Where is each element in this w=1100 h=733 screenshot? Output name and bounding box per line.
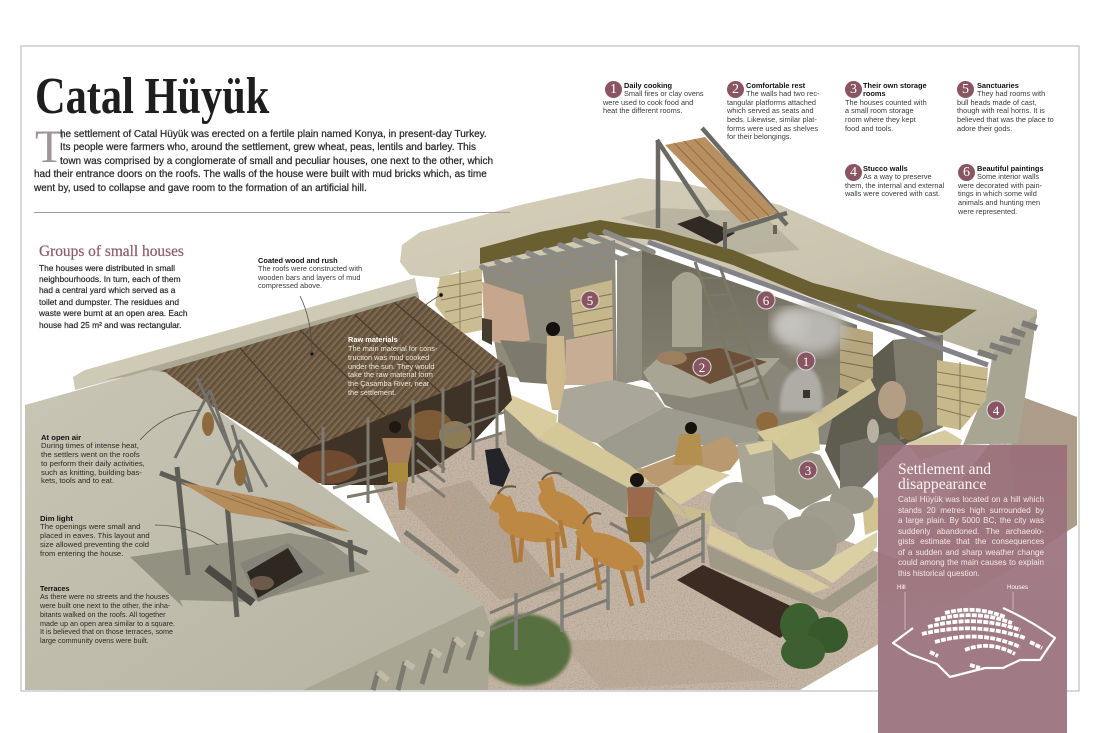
- man beside the goats: [625, 473, 655, 542]
- panel text: could among the main causes to explain: [898, 558, 1044, 567]
- diagram of the hill with houses: [892, 592, 1056, 678]
- text: groups of small houses: had a central yard which served as a: [39, 285, 175, 295]
- text: groups of small houses: house had 25 m² and was rectangular.: [39, 320, 181, 330]
- back house: flat roof: [400, 178, 1037, 353]
- intro text: went by, used to collapse and gave room to the formation of an artificial hill.: [34, 183, 367, 194]
- shed under the thatch: [290, 365, 512, 485]
- note: dim light: size allowed preventing the cold: [40, 540, 149, 549]
- interior rooms: [482, 240, 943, 492]
- note: terraces: large community ovens were built.: [40, 636, 149, 645]
- note: terraces: were built one next to the other, the inha-: [40, 601, 170, 610]
- text 1: heat the different rooms.: [603, 106, 682, 115]
- intro text: had their entrance doors on the roofs. The walls of the house were built with mud bricks which, as time: [34, 169, 487, 180]
- number 2 badge: [727, 81, 744, 98]
- number 4 badge: [845, 164, 862, 181]
- text 3: room where they kept: [845, 115, 916, 124]
- note: coated wood and rush: The roofs were constructed with: [258, 264, 362, 273]
- number 5 badge: 5: [962, 82, 969, 97]
- note: terraces: As there were no streets and the houses: [40, 592, 169, 601]
- panel text: suddenly abandoned. The archaeolo-: [898, 526, 1044, 536]
- number 1 badge: [605, 81, 622, 98]
- text 4: them, the internal and external: [845, 181, 944, 190]
- man in the shed: [382, 421, 413, 510]
- text 3: Their own storage: [863, 80, 927, 90]
- text 6: were decorated with pain-: [958, 181, 1042, 190]
- storage sacks: [710, 482, 874, 570]
- drying frames: [175, 378, 267, 492]
- woman kneeling: [673, 422, 703, 465]
- note: terraces: [40, 584, 175, 645]
- text 5: Sanctuaries: [977, 80, 1019, 90]
- intro text: town was comprised by a conglomerate of small and peculiar houses, one next to the other, which: [60, 156, 493, 167]
- clay oven with smoke: [772, 306, 846, 412]
- note: dim light: placed in eaves. This layout and: [40, 531, 150, 540]
- text 6: [958, 164, 1044, 216]
- text: groups of small houses: neighbourhoods. In turn, each of them: [39, 274, 181, 284]
- note: dim light: Dim light: [40, 514, 73, 522]
- label: houses: Houses: [1007, 584, 1028, 591]
- number 4 badge: 4: [850, 165, 857, 180]
- note: dim light: [40, 514, 150, 558]
- scene number markers: 2: [699, 360, 705, 375]
- note: terraces: Terraces: [40, 584, 69, 592]
- intro text: Its people were farmers who, around the settlement, grew wheat, peas, lentils and barley. This: [60, 142, 476, 153]
- note: raw materials: truction was mud cooked: [348, 353, 429, 362]
- thatched roof: [157, 296, 505, 455]
- scene number markers: 5: [587, 293, 593, 308]
- stepped block: [628, 487, 680, 560]
- right end wall with bricks: [907, 313, 1037, 460]
- scene number markers: 6: [763, 293, 770, 308]
- text 2: beds. Likewise, similar plat-: [727, 115, 817, 124]
- number 1 badge: 1: [610, 82, 617, 97]
- right room back wall: [642, 250, 860, 420]
- text 1: Small fires or clay ovens: [624, 89, 704, 98]
- scene number markers: 3: [805, 463, 811, 478]
- roof beams and mud layer: [480, 220, 988, 365]
- room floor: [643, 360, 860, 445]
- dividing column: [617, 250, 642, 385]
- note: raw materials: Raw materials: [348, 335, 398, 344]
- goats: [489, 473, 649, 606]
- brick pillar: [840, 325, 873, 392]
- intro text: he settlement of Catal Hüyük was erected on a fertile plain named Konya, in present-day Turkey.: [60, 128, 487, 140]
- fences and ladder around the yard: [323, 363, 703, 650]
- note: at open air: to perform their daily activities,: [41, 459, 145, 468]
- note: at open air: such as knitting, building bas-: [41, 468, 142, 476]
- note: coated wood and rush: wooden bars and layers of mud: [258, 273, 360, 282]
- left room back wall: [482, 240, 617, 385]
- text 6: animals and hunting men: [958, 198, 1040, 207]
- ground between the houses: [370, 398, 1077, 690]
- text 4: [845, 164, 944, 198]
- corner brick pier: [435, 268, 482, 335]
- scene number markers: 4: [993, 403, 1000, 418]
- lower floor: [597, 407, 760, 472]
- note: terraces: It is believed that on those terraces, some: [40, 627, 173, 636]
- text: groups of small houses: [38, 262, 188, 330]
- text 2: forms were used as shelves: [727, 124, 818, 133]
- note: coated wood and rush: compressed above.: [258, 281, 322, 290]
- panel: settlement and disappearance: [878, 445, 1067, 733]
- text 2: for their belongings.: [727, 132, 792, 141]
- stepped bricks: [570, 280, 613, 345]
- panel heading: [898, 461, 991, 492]
- woman in the room: [546, 322, 566, 410]
- note: raw materials: [348, 335, 437, 397]
- panel heading: Settlement and: [898, 461, 991, 478]
- timber rack: [160, 467, 367, 617]
- number 6 badge: 6: [963, 165, 970, 180]
- note: at open air: [41, 432, 145, 485]
- text 6: tings in which some wild: [958, 189, 1037, 198]
- note: raw materials: the Çasamba River, near: [348, 379, 429, 388]
- note: coated wood and rush: [258, 256, 362, 290]
- text: groups of small houses: waste were burnt at an open area. Each: [39, 308, 188, 318]
- note: at open air: kets, tools and to eat.: [41, 476, 114, 485]
- panel text: a large plain. By 5000 BC, the city was: [898, 516, 1044, 525]
- pit in the yard: [677, 565, 810, 638]
- rack shade on roof: [620, 208, 800, 255]
- note: terraces: bitants walked on the roofs. All together: [40, 610, 165, 619]
- note: coated wood and rush: Coated wood and rush: [258, 256, 338, 264]
- divider rule: [34, 212, 510, 213]
- text 1: were used to cook food and: [603, 98, 693, 107]
- text 3: The houses counted with: [845, 98, 927, 107]
- number 3 badge: 3: [850, 82, 857, 97]
- text 2: which served as seats and: [727, 106, 814, 115]
- heading: groups of small houses: Groups of small houses: [39, 243, 184, 260]
- title: Catal Hüyük: [35, 68, 269, 125]
- text 5: bull heads made of cast,: [957, 98, 1037, 107]
- drop cap: T: [35, 121, 64, 173]
- panel text: [898, 495, 1044, 578]
- text 2: Comfortable rest: [746, 80, 805, 90]
- raised floor slab: [557, 380, 665, 443]
- scene number markers: 1: [803, 354, 809, 369]
- storage room: [825, 335, 943, 492]
- label: hill: Hill: [897, 584, 906, 591]
- panel text: of a sudden and sharp weather change: [898, 548, 1044, 556]
- callout leader lines: [140, 293, 443, 545]
- note: at open air: During times of intense heat,: [41, 441, 139, 450]
- wall beam stubs: [373, 632, 477, 690]
- note: at open air: the settlers went on the roofs: [41, 450, 140, 459]
- entrance opening in the roof: [240, 543, 325, 602]
- straw on the floor: [630, 436, 743, 487]
- wooden ladder inside the room: [695, 262, 768, 410]
- raised platform and rug: [643, 358, 780, 398]
- panel text: stands 20 metres high surrounded by: [898, 506, 1044, 514]
- panel text: gists estimate that the consequences: [898, 537, 1044, 546]
- note 1: daily cooking: [603, 80, 704, 115]
- text 4: As a way to preserve: [863, 172, 932, 181]
- text 5: [957, 80, 1054, 133]
- number 6 badge: [958, 164, 975, 181]
- bottom wall: [707, 545, 877, 613]
- note: raw materials: the settlement.: [348, 388, 396, 397]
- note 6: beautiful paintings: [958, 164, 1044, 216]
- panel text: this historical question.: [898, 568, 980, 578]
- text: groups of small houses: toilet and dumpster. The residues and: [39, 297, 179, 307]
- text 1: [603, 80, 704, 115]
- text 5: though with real horns. It is: [957, 106, 1045, 115]
- roof hatch: [677, 216, 735, 244]
- left house: flat roof: [25, 370, 490, 690]
- rack shadow: [130, 533, 370, 607]
- note: dim light: The openings were small and: [40, 522, 140, 531]
- storage jars: [878, 381, 906, 419]
- dark dog: [485, 448, 510, 487]
- note: raw materials: The main material for cons-: [348, 344, 437, 353]
- text 3: [845, 80, 927, 133]
- text: groups of small houses: The houses were distributed in small: [39, 262, 175, 272]
- text 1: Daily cooking: [624, 80, 672, 90]
- timber rack on the roof: [657, 128, 787, 250]
- note: terraces: made up an open area similar to a square.: [40, 618, 175, 628]
- text 5: adore their gods.: [957, 124, 1012, 133]
- text 6: Beautiful paintings: [977, 164, 1044, 172]
- note 5: sanctuaries: [957, 80, 1054, 133]
- long wall behind the thatched roof: [73, 278, 420, 390]
- note 2: comfortable rest: [727, 80, 820, 141]
- text 5: They had rooms with: [977, 89, 1045, 98]
- note 4: stucco walls: [845, 164, 944, 198]
- note 3: storage rooms: [845, 80, 927, 133]
- note: at open air: At open air: [41, 432, 81, 442]
- panel text: Catal Hüyük was located on a hill which: [898, 495, 1044, 504]
- note: dim light: from entering the house.: [40, 548, 123, 558]
- number 5 badge: [957, 81, 974, 98]
- house front face: [303, 605, 490, 690]
- low brick walls in the foreground: [500, 390, 878, 613]
- text 4: walls were covered with cast.: [845, 189, 940, 198]
- bench behind sacks: [737, 440, 775, 500]
- text 2: tangular platforms attached: [727, 98, 816, 107]
- number 3 badge: [845, 81, 862, 98]
- panel heading: disappearance: [898, 476, 986, 492]
- text 3: food and tools.: [845, 124, 893, 133]
- text 5: believed that was the place to: [957, 115, 1054, 124]
- text 4: Stucco walls: [863, 164, 908, 172]
- note: raw materials: under the sun. They would: [348, 362, 434, 371]
- number 2 badge: 2: [732, 82, 739, 97]
- text 2: The walls had two rec-: [746, 89, 819, 98]
- green bushes: [479, 603, 848, 686]
- text 6: Some interior walls: [977, 172, 1039, 181]
- text 3: rooms: [863, 89, 886, 98]
- painted lower wall: [565, 332, 613, 385]
- text 6: were represented.: [958, 207, 1017, 216]
- text 2: [727, 80, 820, 141]
- scene number markers: [581, 291, 1005, 479]
- note: raw materials: take the raw material form: [348, 370, 433, 379]
- intro text: [34, 128, 493, 194]
- text 3: a small room storage: [845, 106, 914, 115]
